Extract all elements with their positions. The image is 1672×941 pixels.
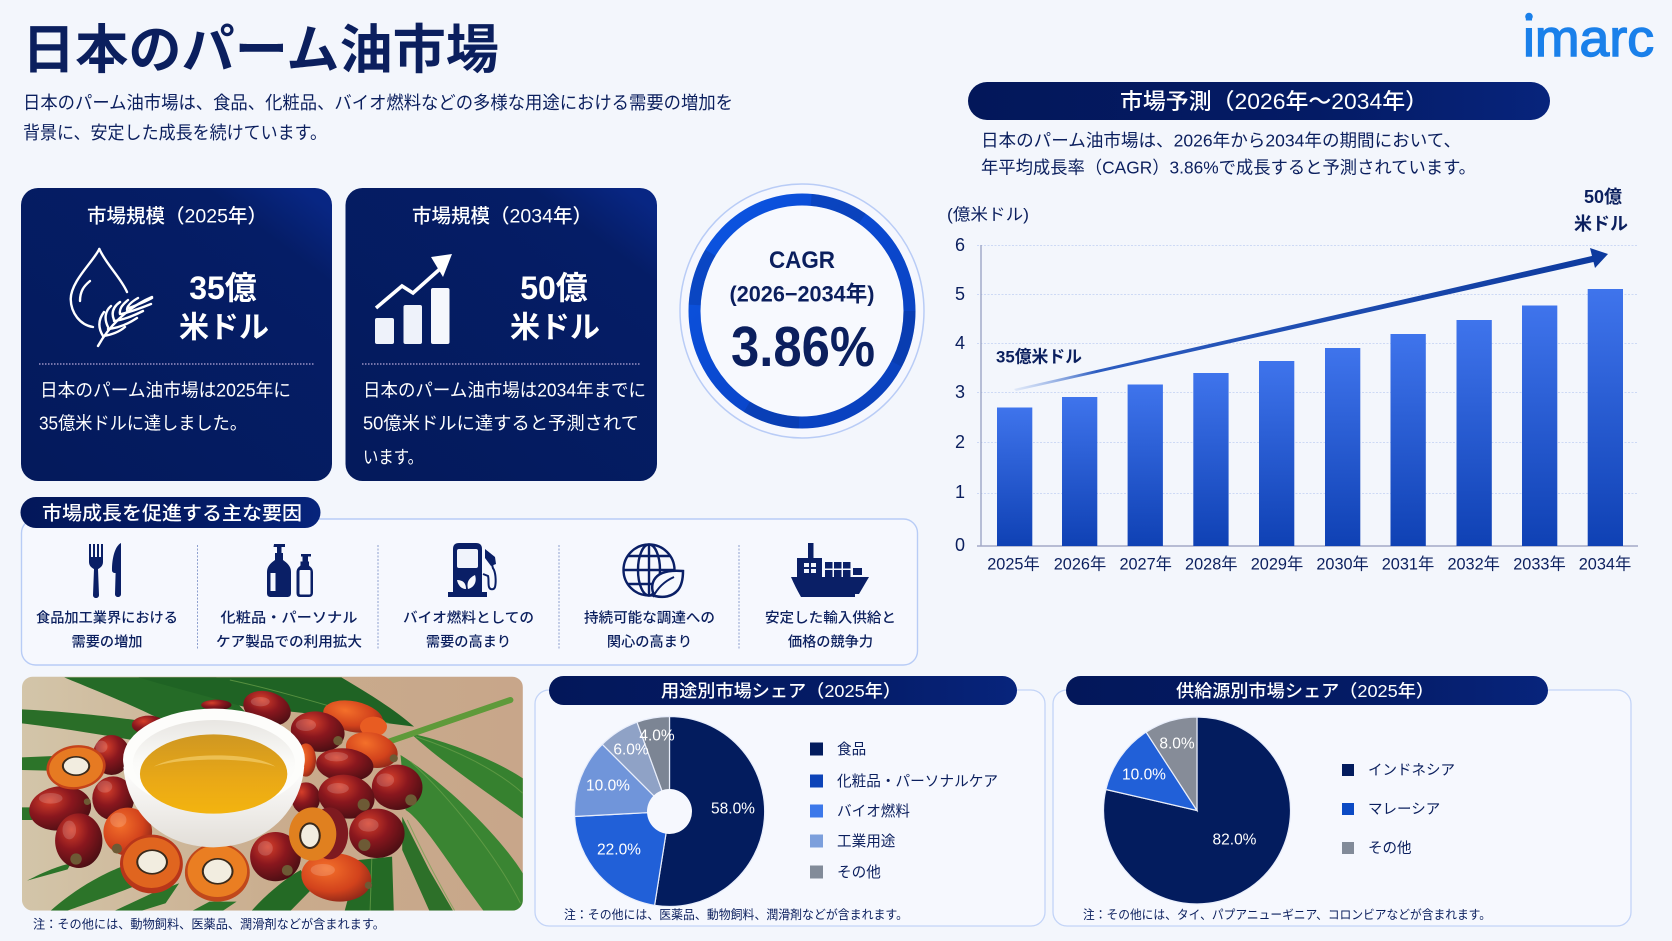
- x axis labels: 2034年: [1579, 556, 1631, 574]
- legend: application: 食品: [837, 741, 866, 758]
- icon: globe with leaf: [624, 544, 683, 597]
- label: 食品加工業界における: [36, 610, 178, 626]
- fruit stems and gloss: [70, 736, 417, 889]
- x axis labels: 2033年: [1513, 556, 1566, 574]
- heading: application share: 用途別市場シェア（2025年）: [661, 681, 901, 701]
- pie chart: application: 4.0%: [639, 728, 675, 744]
- end label: [1574, 187, 1628, 234]
- label: 需要の高まり: [426, 634, 511, 650]
- legend: application: [810, 741, 998, 881]
- legend: supply: マレーシア: [1368, 802, 1440, 818]
- y axis labels: 1: [955, 482, 965, 502]
- y axis labels: 0: [955, 535, 965, 555]
- value: 35億米ドル: 米ドル: [179, 312, 269, 344]
- value: 50億米ドル: [510, 270, 600, 344]
- heading: application share: [549, 676, 1017, 705]
- heading: market size 2025: 市場規模（2025年）: [87, 206, 267, 228]
- icon: cargo ship: [791, 543, 869, 597]
- end label: 50億: [1584, 187, 1622, 207]
- pie chart: application: 6.0%: [613, 742, 649, 758]
- driver: import supply: [765, 543, 896, 650]
- y axis labels: 2: [955, 432, 965, 452]
- label: 関心の高まり: [607, 634, 692, 650]
- forecast description: 日本のパーム油市場は、2026年から2034年の期間において、: [981, 130, 1461, 150]
- label: 持続可能な調達への: [584, 610, 715, 626]
- x axis labels: 2031年: [1382, 556, 1434, 574]
- legend: application: その他: [837, 864, 881, 881]
- panel: share by application: [535, 676, 1045, 926]
- panel: market size 2034: [346, 188, 657, 481]
- panel: share by supply source: [1053, 676, 1631, 926]
- label: 安定した輸入供給と: [765, 610, 896, 626]
- pie chart: application: [574, 716, 765, 906]
- icon: growth chart: [375, 254, 452, 344]
- x axis labels: 2032年: [1447, 556, 1500, 574]
- label: [765, 610, 896, 650]
- title: 日本のパーム油市場: [22, 21, 499, 80]
- description: 日本のパーム油市場は2025年に: [40, 380, 291, 400]
- driver: cosmetics: [216, 544, 362, 650]
- pie chart: supply: 10.0%: [1122, 766, 1166, 784]
- legend: application: 工業用途: [837, 833, 896, 850]
- description: 50億米ドルに達すると予測されて: [363, 414, 639, 434]
- x axis labels: 2030年: [1316, 556, 1369, 574]
- driver: sustainable sourcing: [584, 544, 715, 650]
- label: 化粧品・パーソナル: [220, 610, 358, 626]
- intro text: 日本のパーム油市場は、食品、化粧品、バイオ燃料などの多様な用途における需要の増加を: [23, 93, 733, 113]
- photo: palm fruits and oil bowl: [22, 677, 523, 911]
- CAGR value: [730, 247, 875, 379]
- arrow: growth trend: [1014, 248, 1608, 391]
- label: [216, 610, 362, 650]
- pie chart: supply: 8.0%: [1159, 736, 1195, 752]
- pie chart: application: 22.0%: [597, 842, 641, 858]
- value: 50億米ドル: 米ドル: [510, 312, 600, 344]
- CAGR ring: [680, 184, 924, 438]
- y axis labels: 3: [955, 382, 965, 402]
- heading: drivers: 市場成長を促進する主な要因: [42, 502, 302, 524]
- icon: bottles: [267, 544, 313, 597]
- intro text: [23, 93, 733, 143]
- label: 需要の増加: [72, 634, 142, 650]
- heading: supply share: [1066, 676, 1548, 705]
- description: [363, 380, 646, 468]
- start label: 35億米ドル: [996, 348, 1082, 366]
- heading: market forecast: [968, 82, 1550, 120]
- value: 35億米ドル: [179, 270, 269, 344]
- x axis labels: 2028年: [1185, 556, 1238, 574]
- x axis labels: 2026年: [1054, 556, 1106, 574]
- description: います。: [363, 448, 423, 468]
- label: 価格の競争力: [788, 634, 873, 650]
- legend: supply: [1342, 762, 1455, 857]
- legend: supply: インドネシア: [1368, 762, 1455, 779]
- label: [403, 610, 534, 650]
- y axis labels: 6: [955, 235, 965, 255]
- driver: food processing: [36, 543, 178, 650]
- legend: application: バイオ燃料: [837, 802, 910, 820]
- end label: 米ドル: [1574, 214, 1628, 234]
- legend: supply: その他: [1368, 840, 1412, 857]
- description: 日本のパーム油市場は2034年までに: [363, 380, 646, 400]
- value: 50億米ドル: 50億: [520, 270, 588, 306]
- CAGR value: (2026−2034年): [730, 282, 874, 306]
- y axis labels: 4: [955, 333, 965, 353]
- icon: fork and knife: [89, 543, 121, 598]
- note: application: 注：その他には、医薬品、動物飼料、潤滑剤などが含まれます。: [564, 907, 908, 922]
- bar chart: forecast: [947, 187, 1638, 574]
- heading: supply share: 供給源別市場シェア（2025年）: [1176, 681, 1434, 701]
- icon: oil drop and palm leaf: [71, 249, 152, 346]
- CAGR value: CAGR: [769, 247, 835, 274]
- icon: fuel pump with leaf: [448, 543, 496, 597]
- panel: growth drivers: [20, 497, 917, 665]
- intro text: 背景に、安定した成長を続けています。: [23, 123, 327, 143]
- bars: [997, 289, 1623, 546]
- heading: market size 2034: 市場規模（2034年）: [412, 206, 592, 228]
- legend: application: 化粧品・パーソナルケア: [837, 773, 998, 790]
- forecast description: 年平均成長率（CAGR）3.86%で成長すると予測されています。: [981, 158, 1476, 178]
- value: 35億米ドル: 35億: [189, 270, 257, 306]
- note: supply: 注：その他には、タイ、パプアニューギニア、コロンビアなどが含まれます。: [1083, 907, 1491, 922]
- y axis labels: 5: [955, 284, 965, 304]
- CAGR value: 3.86%: [731, 315, 875, 379]
- x axis labels: [987, 556, 1631, 574]
- axis unit label: (億米ドル): [947, 205, 1029, 224]
- x axis labels: 2029年: [1251, 556, 1303, 574]
- x axis labels: 2027年: [1119, 556, 1172, 574]
- panel: market size 2025: [21, 188, 332, 481]
- description: [39, 380, 291, 434]
- x axis labels: 2025年: [987, 556, 1040, 574]
- logo: imarc: imarc: [1523, 10, 1654, 68]
- label: [36, 610, 178, 650]
- y axis labels: [955, 235, 965, 555]
- pie chart: supply: [1104, 717, 1291, 904]
- pie chart: supply: 82.0%: [1213, 832, 1257, 848]
- driver: biofuel: [403, 543, 534, 650]
- forecast description: [981, 130, 1476, 178]
- pie chart: application: 58.0%: [711, 800, 755, 818]
- note: photo: 注：その他には、動物飼料、医薬品、潤滑剤などが含まれます。: [33, 916, 385, 932]
- heading: drivers: [20, 497, 320, 528]
- description: 35億米ドルに達しました。: [39, 414, 247, 434]
- label: [584, 610, 715, 650]
- pie chart: application: 10.0%: [586, 778, 630, 794]
- label: バイオ燃料としての: [403, 610, 534, 626]
- label: ケア製品での利用拡大: [216, 634, 362, 650]
- heading: market forecast: 市場予測（2026年〜2034年）: [1120, 89, 1428, 114]
